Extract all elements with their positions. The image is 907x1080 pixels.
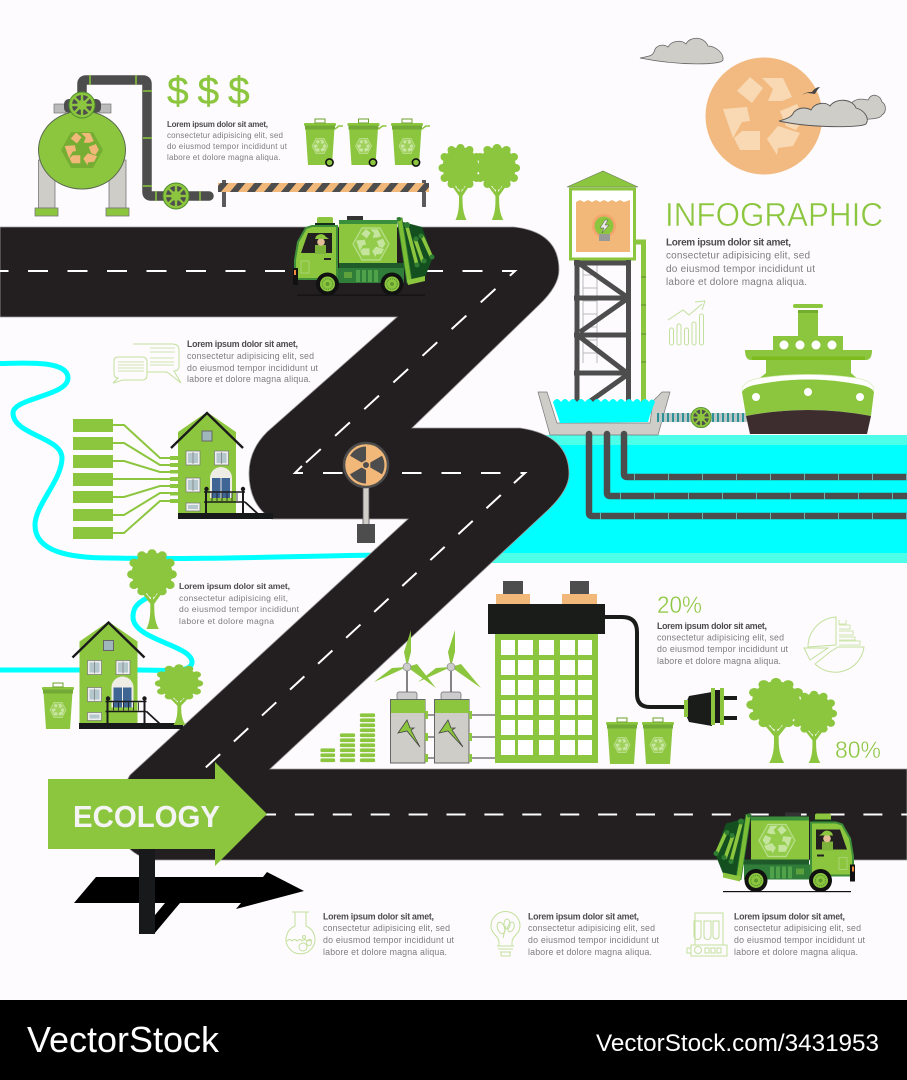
text block: bottom 1: Lorem ipsum dolor sit amet,	[323, 912, 434, 922]
footer band: VectorStock.com/3431953	[596, 1030, 879, 1057]
dollar signs: $	[228, 70, 250, 113]
big trees	[746, 678, 837, 763]
text block: building: do eiusmod tempor incididunt ut	[657, 644, 789, 654]
text block: title: labore et dolore magna aliqua.	[666, 277, 807, 288]
ECOLOGY arrow: ECOLOGY	[73, 799, 220, 834]
dollar signs: $	[167, 70, 189, 113]
text block: title: do eiusmod tempor incididunt ut	[666, 264, 815, 275]
text block: bottom 2: do eiusmod tempor incididunt ut	[528, 935, 660, 945]
text block: bottom 2: labore et dolore magna aliqua.	[528, 947, 652, 957]
20 percent: 20%	[657, 592, 702, 619]
water basin	[538, 392, 670, 435]
recycling bins by building	[606, 718, 674, 764]
text block: bottom 3: labore et dolore magna aliqua.	[734, 947, 858, 957]
bird	[802, 87, 820, 95]
arrow shadow	[74, 870, 304, 934]
icon: pie chart	[804, 617, 864, 672]
ship	[742, 304, 874, 434]
text block: chat: consectetur adipisicing elit, sed	[187, 351, 314, 361]
icon: test tubes	[687, 913, 727, 956]
text block: top left	[167, 120, 288, 162]
garbage truck top	[293, 216, 434, 296]
windows	[501, 640, 592, 755]
text block: building: Lorem ipsum dolor sit amet,	[657, 621, 767, 631]
striped barrier	[218, 180, 429, 207]
text block: top left: Lorem ipsum dolor sit amet,	[167, 120, 268, 129]
text block: bottom 3	[734, 912, 866, 957]
sign post	[139, 849, 155, 934]
text block: top left: consectetur adipisicing elit, sed	[167, 131, 283, 140]
text block: top left: do eiusmod tempor incididunt ut	[167, 142, 288, 151]
text block: top left: labore et dolore magna aliqua.	[167, 153, 280, 162]
road centre line bottom	[257, 814, 907, 816]
text block: chat: Lorem ipsum dolor sit amet,	[187, 339, 298, 349]
icon: flask	[286, 912, 315, 954]
radiation sign	[344, 443, 388, 543]
clouds and sun	[640, 38, 885, 174]
building with power plug	[488, 581, 737, 763]
water tower	[567, 171, 646, 402]
text block: middle left: do eiusmod tempor incididunt	[179, 604, 300, 614]
recycle bin near house	[42, 683, 74, 729]
icon: chat bubbles	[113, 344, 181, 383]
cable and plug	[605, 617, 688, 707]
text block: chat	[187, 339, 319, 384]
cloud left	[640, 38, 723, 64]
text block: chat: labore et dolore magna aliqua.	[187, 374, 311, 384]
text block: title: consectetur adipisicing elit, sed	[666, 250, 810, 262]
text block: building: labore et dolore magna aliqua.	[657, 656, 781, 666]
storage tank with pipes	[35, 75, 209, 216]
dollar signs: $	[198, 70, 220, 113]
recycling bins row	[304, 119, 430, 166]
tree on river	[127, 549, 177, 629]
80 percent: 80%	[835, 737, 881, 764]
wind turbines on batteries	[374, 630, 481, 693]
text block: middle left: consectetur adipisicing elit,	[179, 593, 288, 603]
text block: bottom 1: consectetur adipisicing elit, sed	[323, 923, 450, 933]
text block: middle left: labore et dolore magna	[179, 616, 274, 626]
house upper	[171, 412, 273, 519]
sun with recycle sign	[706, 58, 822, 174]
tree near house	[155, 664, 203, 725]
INFOGRAPHIC title: INFOGRAPHIC	[665, 196, 883, 233]
text block: middle left	[179, 581, 300, 626]
text block: chat: do eiusmod tempor incididunt ut	[187, 363, 319, 373]
text block: bottom 2: Lorem ipsum dolor sit amet,	[528, 912, 639, 922]
text block: title: Lorem ipsum dolor sit amet,	[666, 238, 791, 248]
text block: bottom 2: consectetur adipisicing elit, sed	[528, 923, 655, 933]
text block: bottom 3: do eiusmod tempor incididunt ut	[734, 935, 866, 945]
text block: bottom 1	[323, 912, 455, 957]
batteries	[390, 692, 495, 763]
text block: title	[666, 238, 815, 288]
text block: bottom 1: labore et dolore magna aliqua.	[323, 947, 447, 957]
road centre line	[0, 271, 525, 782]
bulb	[592, 214, 616, 241]
icon: bulb	[491, 912, 520, 956]
footer band	[0, 1000, 907, 1080]
cloud right front	[779, 100, 867, 127]
text block: bottom 1: do eiusmod tempor incididunt ut	[323, 935, 455, 945]
ECOLOGY arrow	[48, 762, 267, 866]
footer band: VectorStock	[27, 1019, 220, 1060]
text block: bottom 2	[528, 912, 660, 957]
dollar signs	[167, 70, 250, 113]
text block: building	[657, 621, 789, 666]
connector bars	[73, 419, 178, 539]
garbage truck bottom	[714, 812, 855, 892]
icon: growth chart	[668, 301, 705, 345]
pipe to ship with valve	[657, 407, 747, 428]
river upper	[0, 363, 380, 559]
river lower	[0, 598, 192, 670]
text block: bottom 3: Lorem ipsum dolor sit amet,	[734, 912, 845, 922]
text block: bottom 3: consectetur adipisicing elit, sed	[734, 923, 861, 933]
cloud right back	[850, 95, 885, 119]
coins	[320, 713, 376, 762]
house lower	[72, 622, 183, 729]
water body	[480, 435, 907, 563]
zigzag road	[0, 227, 907, 860]
trees top	[438, 144, 520, 220]
text block: middle left: Lorem ipsum dolor sit amet,	[179, 581, 290, 591]
underwater pipes	[589, 434, 907, 516]
text block: building: consectetur adipisicing elit, sed	[657, 632, 784, 642]
